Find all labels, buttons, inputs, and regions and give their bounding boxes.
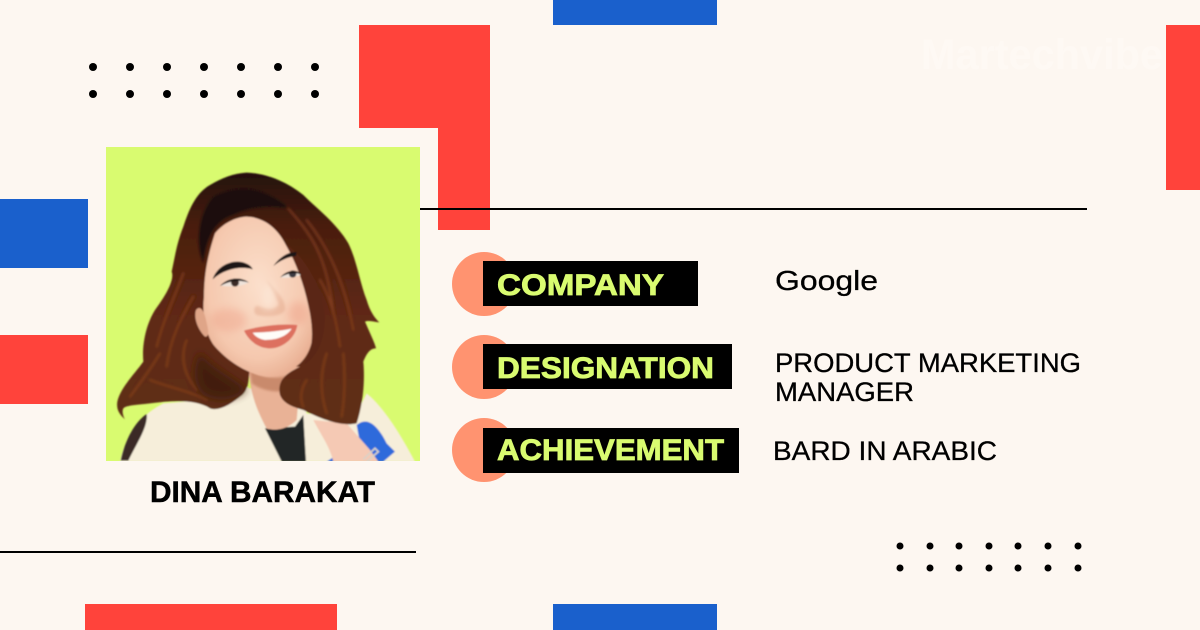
eyes bbox=[221, 279, 248, 287]
decorative block: bottom red bbox=[85, 604, 337, 630]
accent circle bbox=[452, 335, 516, 399]
portrait artwork bbox=[117, 173, 415, 462]
decorative block: left red bbox=[0, 335, 88, 404]
value text: Google bbox=[775, 265, 878, 296]
name: Dina Barakat: DINA BARAKAT bbox=[150, 476, 375, 509]
decorative block: red corner shape bbox=[359, 25, 490, 230]
label bar bbox=[483, 261, 698, 306]
hand bbox=[313, 420, 378, 462]
dot grid: top left bbox=[89, 63, 319, 98]
row: company bbox=[452, 252, 878, 316]
label bar bbox=[483, 344, 732, 389]
label text: COMPANY bbox=[497, 269, 664, 302]
accent circle bbox=[452, 252, 516, 316]
value text: MANAGER bbox=[775, 377, 914, 407]
decorative block: right red bbox=[1166, 25, 1200, 190]
label bar bbox=[483, 428, 739, 473]
hair highlights bbox=[130, 207, 353, 417]
decorative block: top blue bbox=[553, 0, 717, 25]
hair bbox=[117, 173, 379, 424]
portrait panel: Dina Barakat illustration on lime square bbox=[106, 147, 420, 462]
label text: ACHIEVEMENT bbox=[497, 434, 724, 467]
wrist bracelet bbox=[363, 448, 378, 462]
row: achievement bbox=[452, 418, 997, 482]
accent circle bbox=[452, 418, 516, 482]
eyebrows bbox=[213, 262, 253, 279]
face bbox=[203, 217, 313, 377]
mouth bbox=[244, 325, 297, 348]
row: designation bbox=[452, 335, 1081, 407]
decorative block: bottom blue bbox=[553, 604, 717, 630]
portrait background bbox=[106, 147, 420, 461]
decorative block: left blue bbox=[0, 199, 88, 268]
neck bbox=[248, 363, 302, 430]
cheek blush bbox=[210, 308, 247, 332]
watermark: Martechvibe: Martechvibe bbox=[921, 31, 1163, 79]
dot grid: bottom right bbox=[896, 542, 1082, 572]
undershirt bbox=[265, 415, 306, 462]
nose bbox=[254, 286, 286, 317]
jacket bbox=[120, 382, 415, 462]
value text: PRODUCT MARKETING bbox=[775, 348, 1081, 378]
hair strand over face bbox=[289, 247, 322, 343]
value text bbox=[775, 348, 1081, 407]
label text: DESIGNATION bbox=[497, 352, 714, 385]
value text: BARD IN ARABIC bbox=[773, 436, 997, 466]
ear bbox=[195, 308, 208, 337]
